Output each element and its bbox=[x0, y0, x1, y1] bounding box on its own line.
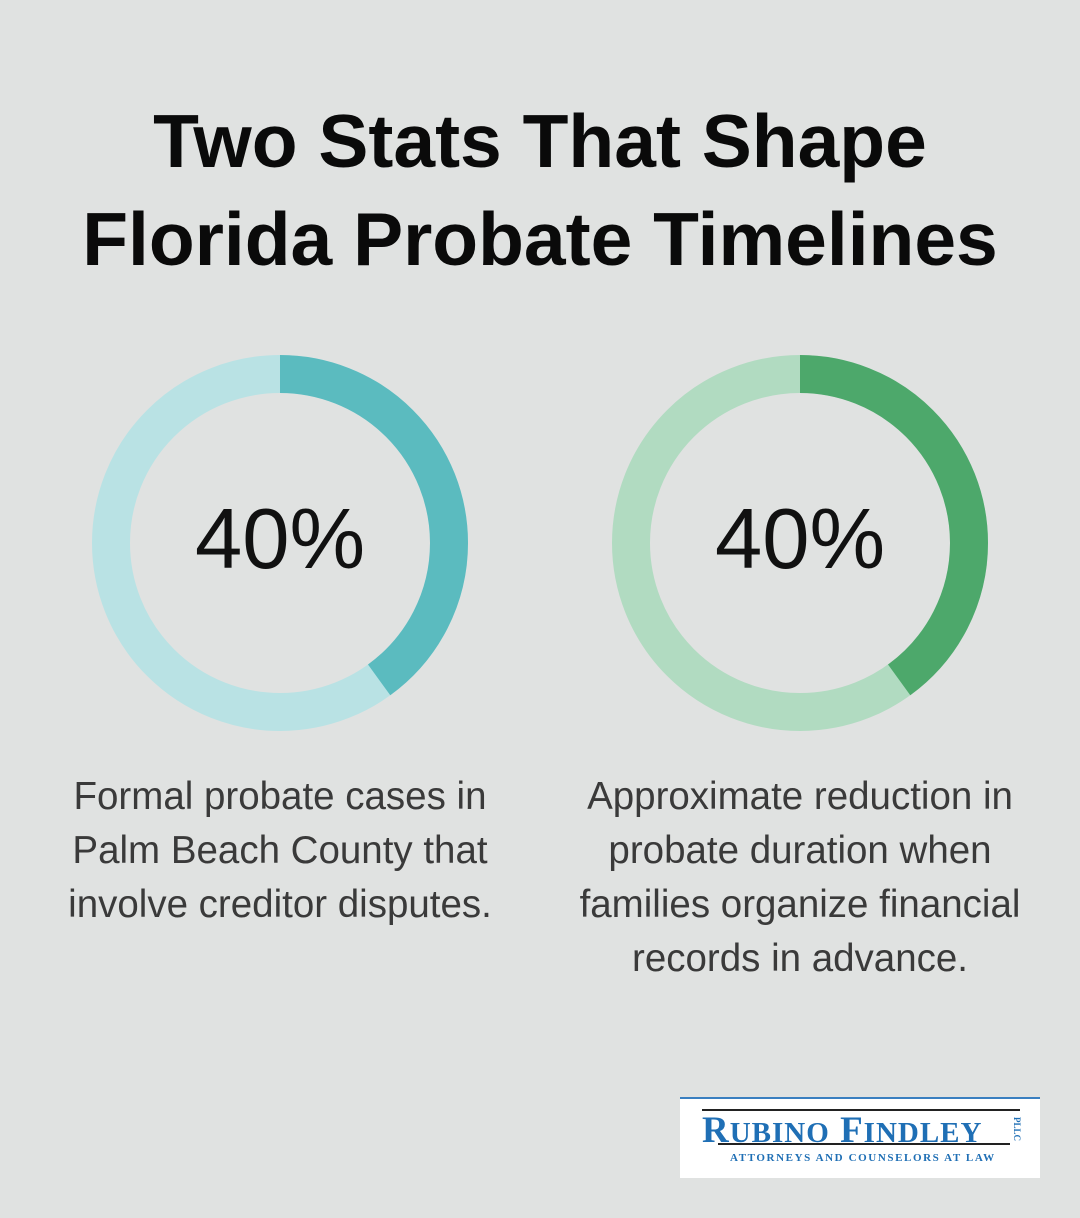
title: Two Stats That Shape bbox=[153, 99, 927, 183]
donut chart: right bbox=[612, 355, 988, 731]
logo bbox=[680, 1097, 1040, 1178]
description: left: Formal probate cases in Palm Beach County that involve creditor disputes. bbox=[68, 775, 492, 926]
logo: PLLC bbox=[1012, 1117, 1022, 1141]
stat number: left: 40% bbox=[195, 492, 365, 587]
title: Florida Probate Timelines bbox=[82, 197, 998, 281]
title bbox=[82, 99, 998, 281]
logo: ATTORNEYS AND COUNSELORS AT LAW bbox=[730, 1152, 996, 1164]
donut chart: left bbox=[92, 355, 468, 731]
stat number: right: 40% bbox=[715, 492, 885, 587]
description: right: Approximate reduction in probate duration when families organize financial records in advance. bbox=[580, 775, 1020, 980]
logo: RUBINO FINDLEY bbox=[702, 1110, 982, 1151]
